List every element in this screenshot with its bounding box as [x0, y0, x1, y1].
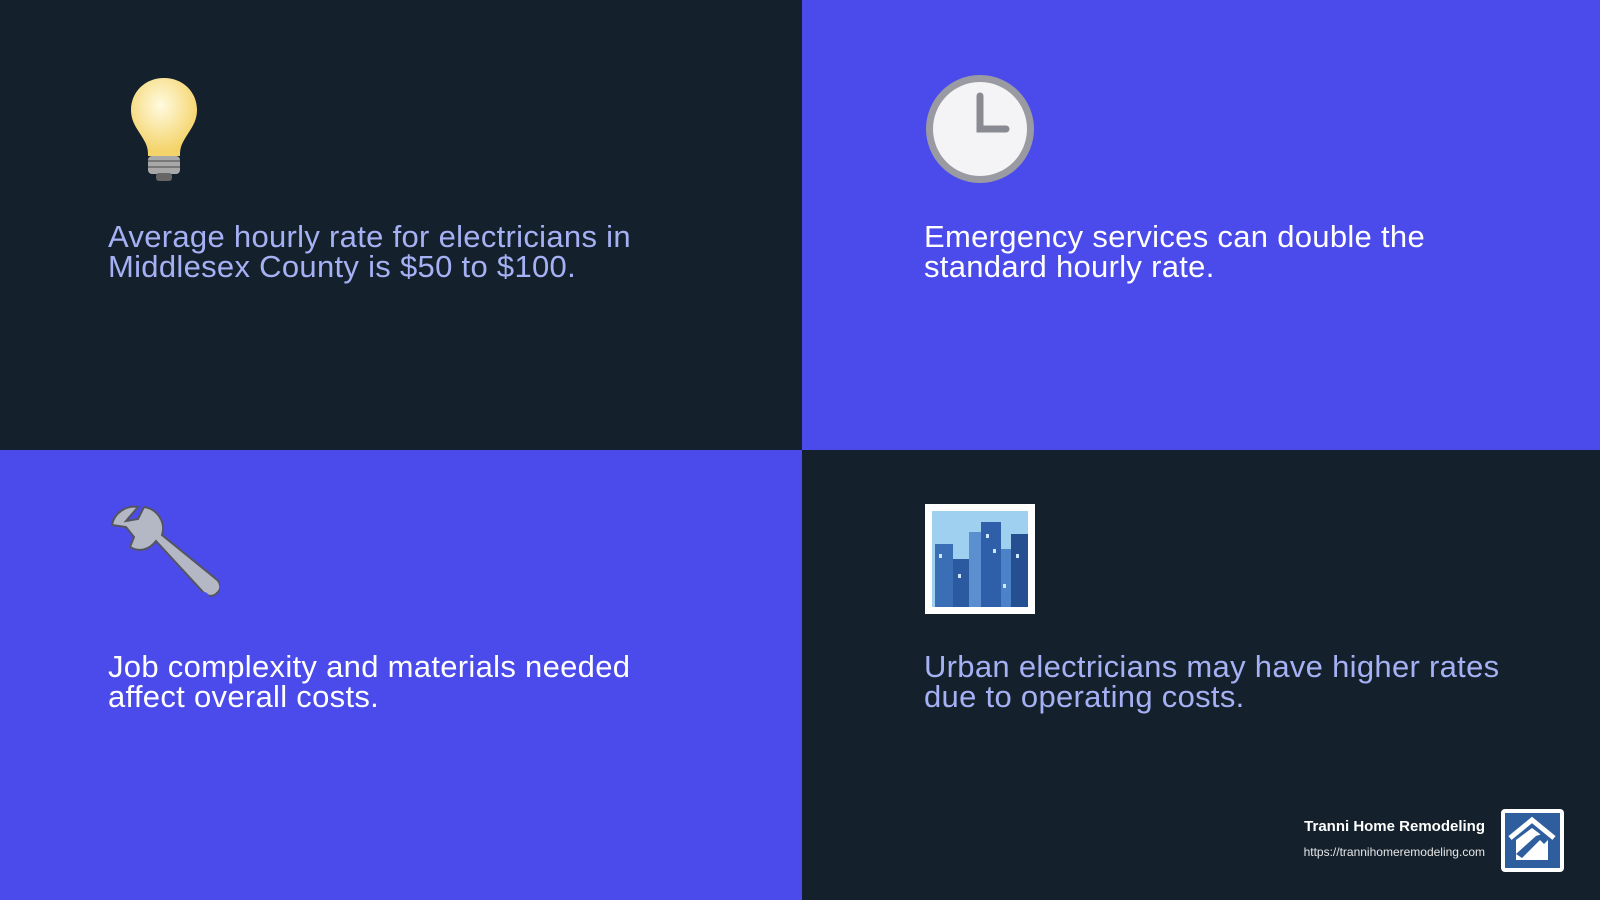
text: urban: due to operating costs. [924, 679, 1245, 714]
text: urban: Urban electricians may have higher rates [924, 649, 1499, 684]
text: urban [924, 649, 1499, 714]
icon: wrench [110, 506, 220, 597]
icon: clock [926, 75, 1034, 183]
brand block [1304, 809, 1564, 872]
text: emergency: standard hourly rate. [924, 249, 1215, 284]
panel: job complexity [0, 450, 802, 900]
panel: urban [802, 450, 1600, 900]
text: emergency [924, 219, 1425, 284]
panel: hourly rate [0, 0, 802, 450]
icon: cityscape [925, 504, 1035, 614]
text: hourly rate [108, 219, 631, 284]
text: job complexity [108, 649, 630, 714]
text: emergency: Emergency services can double the [924, 219, 1425, 254]
brand name: Tranni Home Remodeling [1304, 818, 1485, 835]
logo [1501, 809, 1564, 872]
text: job complexity: affect overall costs. [108, 679, 379, 714]
text: job complexity: Job complexity and materials needed [108, 649, 630, 684]
text: hourly rate: Middlesex County is $50 to $100. [108, 249, 576, 284]
text: hourly rate: Average hourly rate for electricians in [108, 219, 631, 254]
brand url: https://trannihomeremodeling.com [1304, 845, 1485, 859]
panel: emergency [802, 0, 1600, 450]
icon: light bulb [131, 78, 197, 181]
